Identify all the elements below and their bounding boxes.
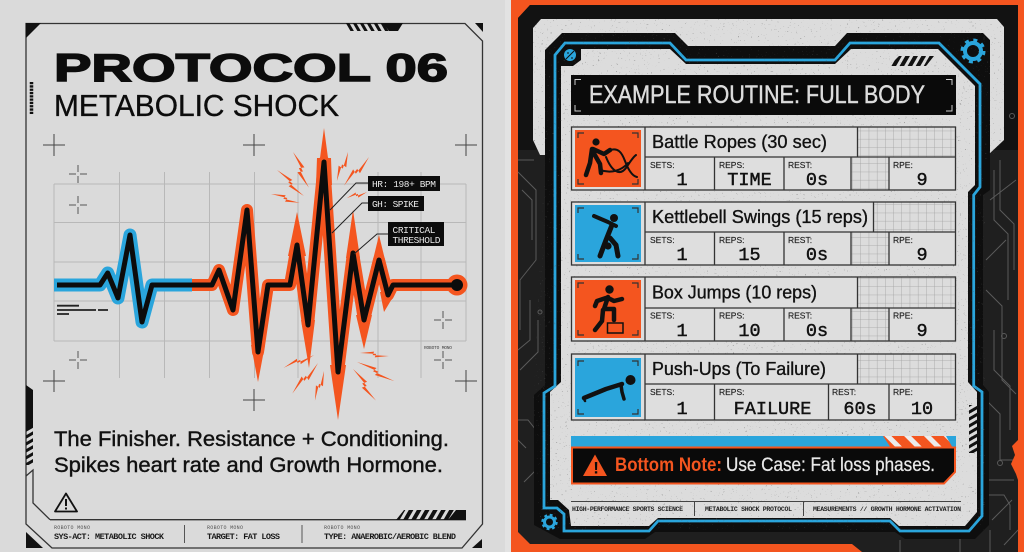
- note text: Bottom Note:: [615, 455, 722, 476]
- blue trim line: [544, 43, 982, 531]
- stats: sets: 1: [676, 170, 688, 191]
- exercise row: push-ups: [572, 354, 956, 420]
- stats: rpe: 9: [916, 245, 928, 266]
- stats: reps: FAILURE: [734, 399, 811, 420]
- icon: warning triangle: [55, 494, 77, 512]
- subtitle: METABOLIC SHOCK: [54, 88, 339, 123]
- icon: battle ropes: [575, 130, 641, 187]
- stats: reps: REPS:: [719, 387, 745, 397]
- icon: kettlebell swing: [575, 205, 641, 262]
- stats: reps: REPS:: [719, 310, 745, 320]
- circuit traces: [518, 160, 1018, 552]
- stats: rpe: RPE:: [893, 235, 913, 245]
- bottom note: !: [593, 458, 599, 478]
- footer strip: METABOLIC SHOCK PROTOCOL: [705, 506, 792, 513]
- readout: target: ROBOTO MONO: [207, 525, 243, 531]
- readout: sys-act: [54, 525, 165, 542]
- readout: type: ROBOTO MONO: [324, 525, 360, 531]
- stats: rest: 60s: [843, 399, 877, 420]
- stats: rest: [788, 160, 828, 191]
- readout: target: [207, 525, 280, 542]
- hazard stripes top: [889, 56, 934, 66]
- stats: rest: REST:: [788, 310, 812, 320]
- chart grid: [54, 172, 466, 378]
- icon: globe badge: [564, 49, 576, 61]
- callout: critical threshold: CRITICAL: [392, 225, 436, 236]
- black trace: [57, 162, 457, 372]
- frame: black and blue border: [534, 33, 990, 539]
- stats: reps: 15: [738, 245, 761, 266]
- stats: rest: [788, 310, 828, 342]
- description text: Spikes heart rate and Growth Hormone.: [54, 454, 443, 477]
- exercise name: Box Jumps (10 reps): [652, 282, 817, 302]
- stats: reps: [719, 310, 761, 342]
- icon: gear bottom left: [542, 515, 556, 529]
- stats: sets: 1: [676, 399, 688, 420]
- stats: rpe: RPE:: [893, 160, 913, 170]
- stats: rpe: 9: [916, 321, 928, 342]
- footer status readouts: [54, 525, 456, 543]
- stats: reps: [719, 387, 811, 420]
- icon: gear top right: [962, 40, 984, 62]
- stats: reps: REPS:: [719, 235, 745, 245]
- registration crosshairs: [43, 134, 477, 411]
- stats: reps: [719, 235, 761, 266]
- lightning bolts around spikes: [270, 150, 396, 403]
- stats: rpe: [893, 310, 928, 342]
- stats: sets: [650, 387, 688, 420]
- stats: sets: SETS:: [650, 387, 675, 397]
- stats: rest: 0s: [806, 321, 828, 342]
- exercise name: Battle Ropes (30 sec): [652, 132, 827, 152]
- readout: type: [324, 525, 456, 542]
- readout: sys-act: ROBOTO MONO: [54, 525, 90, 531]
- exercise name: Push-Ups (To Failure): [652, 359, 826, 379]
- micro label: ROBOTO MONO: [424, 345, 452, 351]
- stats: sets: 1: [676, 321, 688, 342]
- hazard stripes right edge: [969, 405, 977, 453]
- stats: rest: [832, 387, 877, 420]
- footer strip: [571, 502, 961, 516]
- stats: reps: TIME: [727, 170, 772, 191]
- readout: target: TARGET: FAT LOSS: [207, 532, 280, 542]
- stats: reps: REPS:: [719, 160, 745, 170]
- stats: rest: 0s: [806, 170, 828, 191]
- stats: rpe: [893, 235, 928, 266]
- grunge texture: [533, 19, 1004, 530]
- heading bar: [571, 75, 956, 115]
- stats: rest: 0s: [806, 245, 828, 266]
- exercise row: kettlebell swings: [572, 202, 956, 266]
- stats: sets: SETS:: [650, 160, 675, 170]
- icon: box jump: [575, 280, 641, 338]
- stats: rpe: RPE:: [893, 387, 913, 397]
- readout: sys-act: SYS-ACT: METABOLIC SHOCK: [54, 532, 165, 542]
- orange spike outline: [192, 128, 468, 420]
- stats: sets: [650, 310, 688, 342]
- callout: growth hormone: GH: SPIKE: [372, 199, 419, 210]
- exercise name: Kettlebell Swings (15 reps): [652, 207, 868, 227]
- stats: rpe: 10: [911, 399, 933, 420]
- panel: example routine: [511, 0, 1024, 552]
- heading bar: EXAMPLE ROUTINE: FULL BODY: [589, 81, 925, 109]
- icon: warning: [583, 454, 607, 476]
- description text: The Finisher. Resistance + Conditioning.: [54, 428, 449, 451]
- stats: sets: 1: [676, 245, 688, 266]
- stats: rpe: [893, 160, 928, 191]
- footer strip: HIGH-PERFORMANCE SPORTS SCIENCE: [572, 506, 683, 513]
- stats: rest: REST:: [832, 387, 856, 397]
- exercise row: box jumps: [572, 277, 956, 342]
- blue resting segment: [54, 235, 192, 322]
- stats: sets: [650, 160, 688, 191]
- orange paint splatter: [1011, 440, 1024, 480]
- stats: reps: 10: [738, 321, 761, 342]
- stats: rpe: [893, 387, 933, 420]
- callout: critical threshold: THRESHOLD: [392, 235, 441, 246]
- stats: sets: SETS:: [650, 235, 675, 245]
- frame: outer technical border: [26, 23, 483, 548]
- data dashes: [57, 306, 108, 314]
- description text: [54, 428, 449, 477]
- stats: rest: REST:: [788, 235, 812, 245]
- callout: growth hormone: [332, 196, 424, 233]
- stats: sets: [650, 235, 688, 266]
- callout: critical threshold: [354, 222, 444, 254]
- bottom note: Use Case: Fat loss phases.: [726, 455, 935, 476]
- panel: protocol overview: [0, 0, 511, 552]
- stats: rest: [788, 235, 828, 266]
- footer strip: MEASUREMENTS // GROWTH HORMONE ACTIVATION: [813, 506, 961, 513]
- stats: sets: SETS:: [650, 310, 675, 320]
- callout: heart rate: [330, 176, 440, 210]
- readout: type: TYPE: ANAEROBIC/AEROBIC BLEND: [324, 532, 456, 542]
- bottom note: [571, 436, 956, 484]
- callout: heart rate: HR: 198+ BPM: [372, 179, 436, 190]
- stats: rpe: 9: [916, 170, 928, 191]
- exercise row: battle ropes: [572, 127, 956, 191]
- outer light plate: [533, 19, 1004, 155]
- stats: rpe: RPE:: [893, 310, 913, 320]
- title: PROTOCOL 06: [54, 47, 448, 90]
- inner light plate: [550, 49, 977, 526]
- stats: rest: REST:: [788, 160, 812, 170]
- icon: push-up: [575, 358, 641, 417]
- heartbeat chart: ECG waveform: [54, 128, 468, 420]
- stats: reps: [719, 160, 772, 191]
